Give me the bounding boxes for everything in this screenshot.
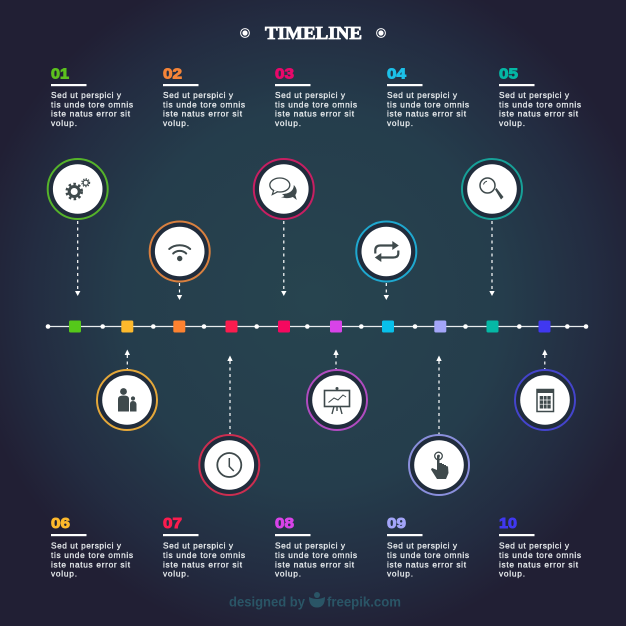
arrow 01 [75, 221, 80, 296]
arrow 04 [384, 283, 389, 300]
arrow 07 [227, 356, 233, 435]
text block 02: 02 [163, 66, 182, 82]
footer credit [229, 592, 401, 610]
text block 05 [499, 66, 581, 128]
arrow 02 [177, 283, 182, 300]
text block 10 [499, 516, 581, 579]
text block 02 [163, 66, 245, 128]
arrow 10 [542, 350, 548, 369]
footer credit: designed by [229, 594, 305, 610]
text block 05: 05 [499, 66, 518, 82]
arrow 06 [125, 350, 130, 369]
text block 09 [387, 516, 469, 579]
text block 06 [51, 516, 133, 579]
node 10: calculator icon [515, 370, 575, 430]
text block 06: 06 [51, 516, 70, 532]
arrow 05 [489, 221, 495, 296]
text block 03: 03 [275, 66, 294, 82]
text block 07: 07 [163, 516, 182, 532]
node 06: people icon [97, 370, 157, 430]
node 09: touch hand icon [409, 435, 469, 495]
text block 01 [51, 66, 133, 128]
node 03: speech bubbles icon [254, 159, 314, 219]
text block 09: 09 [387, 516, 406, 532]
arrow 09 [436, 356, 442, 435]
arrow 08 [333, 350, 339, 369]
arrow 03 [281, 221, 286, 296]
text block 07 [163, 516, 245, 579]
node 08: presentation board icon [307, 370, 367, 430]
title: TIMELINE [265, 23, 362, 43]
node 04: repeat arrows icon [356, 222, 416, 282]
text block 01: 01 [51, 66, 69, 82]
text block 04 [387, 66, 469, 128]
text block 10: 10 [499, 516, 517, 532]
footer credit: freepik.com [327, 594, 401, 610]
text block 08 [275, 516, 357, 579]
text block 08: 08 [275, 516, 294, 532]
node 01: gears icon [48, 159, 108, 219]
text block 03 [275, 66, 357, 128]
node 05: magnifier icon [462, 159, 522, 219]
title [241, 23, 385, 43]
node 07: clock icon [199, 435, 259, 495]
timeline axis [46, 320, 588, 332]
text block 04: 04 [387, 66, 406, 82]
node 02: wifi icon [150, 222, 210, 282]
